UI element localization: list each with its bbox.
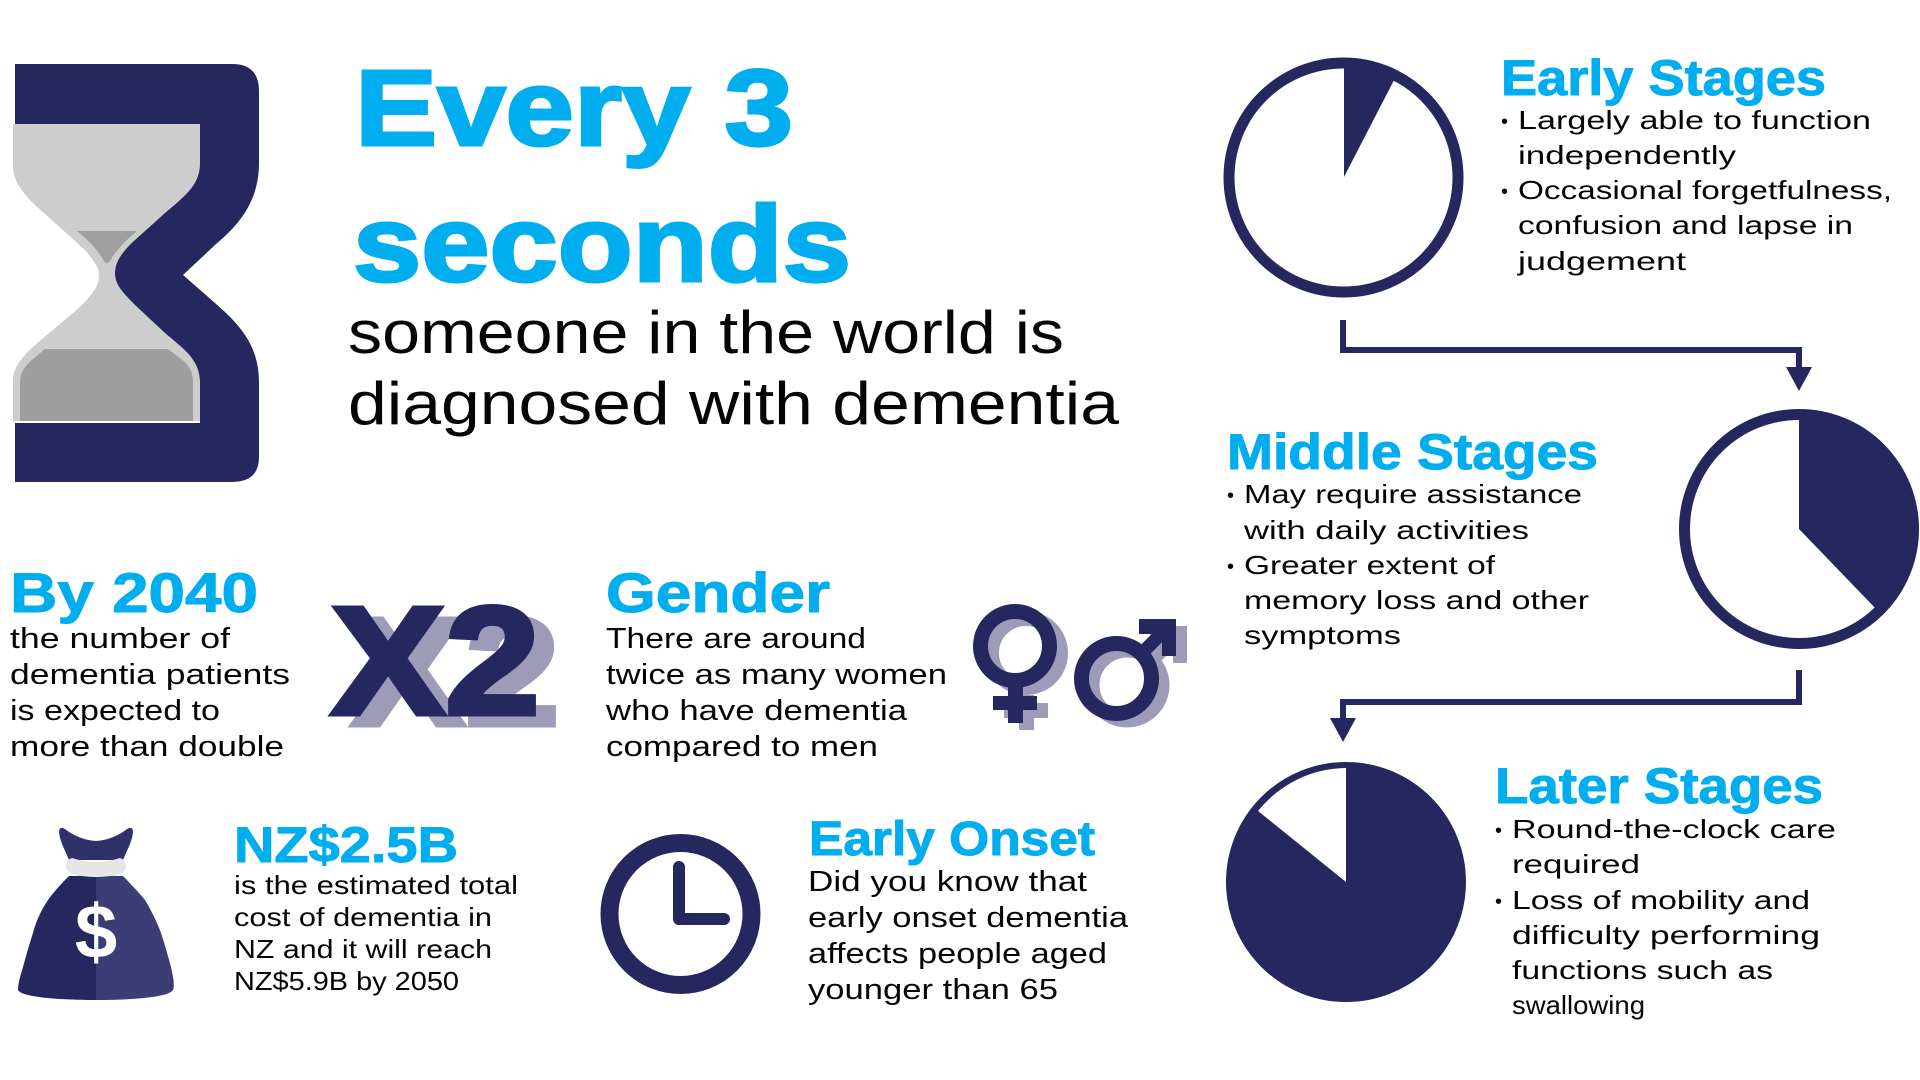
icon: x2 with shadow: X2: [331, 575, 540, 747]
text: middle stages bullets: with daily activities: [1243, 515, 1529, 545]
text: by 2040 description: is expected to: [10, 695, 220, 727]
icon: male symbol: [1082, 619, 1187, 720]
text: middle stages bullets: Greater extent of: [1244, 550, 1496, 580]
chart: middle stages pie: [1684, 414, 1914, 644]
text: cost description: [234, 870, 518, 996]
text: gender description: [605, 623, 947, 763]
title: every 3 seconds: [353, 47, 851, 304]
icon: x2 with shadow: X2: [351, 586, 560, 758]
text: early onset description: [808, 866, 1129, 1006]
heading: gender: Gender: [606, 561, 830, 624]
icon: hourglass: [13, 64, 259, 482]
text: early onset description: affects people aged: [808, 938, 1107, 970]
text: later stages bullets: functions such as: [1512, 955, 1773, 985]
text: later stages bullets: difficulty performing: [1512, 920, 1820, 950]
text: by 2040 description: dementia patients: [10, 659, 290, 691]
subtitle: [348, 299, 1120, 437]
text: later stages bullets: Loss of mobility and: [1512, 885, 1810, 915]
text: early stages bullets: [1501, 105, 1892, 276]
text: middle stages bullets: •: [1227, 485, 1234, 507]
text: later stages bullets: •: [1495, 891, 1502, 913]
text: later stages bullets: •: [1495, 820, 1502, 842]
panel: later stages: [1495, 758, 1836, 1020]
text: gender description: twice as many women: [606, 659, 947, 691]
text: middle stages bullets: memory loss and other: [1244, 585, 1589, 615]
text: later stages bullets: required: [1512, 849, 1640, 879]
heading: early onset: Early Onset: [809, 813, 1095, 866]
panel: cost: [234, 817, 518, 996]
text: early stages bullets: •: [1501, 181, 1508, 203]
arrow: early to middle: [1343, 320, 1812, 391]
subtitle: someone in the world is: [348, 299, 1064, 366]
text: by 2040 description: more than double: [10, 731, 284, 763]
subtitle: diagnosed with dementia: [348, 370, 1120, 437]
text: later stages bullets: Round-the-clock care: [1512, 814, 1836, 844]
text: later stages bullets: [1495, 814, 1836, 1020]
heading: NZ$2.5B: NZ$2.5B: [234, 817, 458, 873]
text: middle stages bullets: •: [1227, 556, 1234, 578]
text: middle stages bullets: symptoms: [1244, 620, 1401, 650]
text: early stages bullets: Largely able to function: [1518, 105, 1871, 135]
text: cost description: cost of dementia in: [234, 902, 492, 932]
text: early stages bullets: judgement: [1517, 246, 1687, 276]
heading: early stages: Early Stages: [1501, 50, 1826, 106]
panel: by 2040: [10, 561, 290, 763]
title: every 3 seconds: seconds: [353, 183, 851, 304]
text: early stages bullets: independently: [1518, 140, 1736, 170]
text: cost description: is the estimated total: [234, 870, 518, 900]
text: early stages bullets: Occasional forgetfulness,: [1518, 175, 1892, 205]
text: middle stages bullets: May require assistance: [1244, 479, 1582, 509]
icon: clock: [610, 843, 752, 985]
text: middle stages bullets: [1227, 479, 1589, 650]
arrow: middle to later: [1330, 670, 1799, 742]
text: early onset description: Did you know that: [808, 866, 1087, 898]
text: early stages bullets: •: [1501, 111, 1508, 133]
icon: female symbol: [980, 612, 1060, 730]
text: gender description: compared to men: [606, 731, 878, 763]
panel: early stages: [1501, 50, 1892, 276]
heading: later stages: Later Stages: [1495, 758, 1823, 814]
text: early stages bullets: confusion and lapse in: [1518, 210, 1853, 240]
icon: money bag: [18, 828, 174, 1000]
text: by 2040 description: the number of: [10, 623, 231, 655]
text: cost description: NZ$5.9B by 2050: [234, 966, 459, 996]
chart: early stages pie: [1229, 63, 1458, 292]
text: early onset description: younger than 65: [808, 974, 1058, 1006]
text: gender description: who have dementia: [605, 695, 908, 727]
title: every 3 seconds: Every 3: [355, 47, 793, 168]
text: by 2040 description: [10, 623, 290, 763]
text: cost description: NZ and it will reach: [234, 934, 492, 964]
text: later stages bullets: swallowing: [1512, 990, 1645, 1020]
icon: money bag: $: [75, 890, 117, 975]
panel: middle stages: [1227, 424, 1598, 650]
text: gender description: There are around: [606, 623, 866, 655]
heading: by 2040: By 2040: [10, 561, 258, 624]
chart: later stages pie: [1232, 768, 1460, 996]
text: early onset description: early onset dementia: [808, 902, 1129, 934]
panel: early onset: [808, 813, 1129, 1006]
heading: middle stages: Middle Stages: [1227, 424, 1598, 480]
panel: gender: [605, 561, 947, 763]
